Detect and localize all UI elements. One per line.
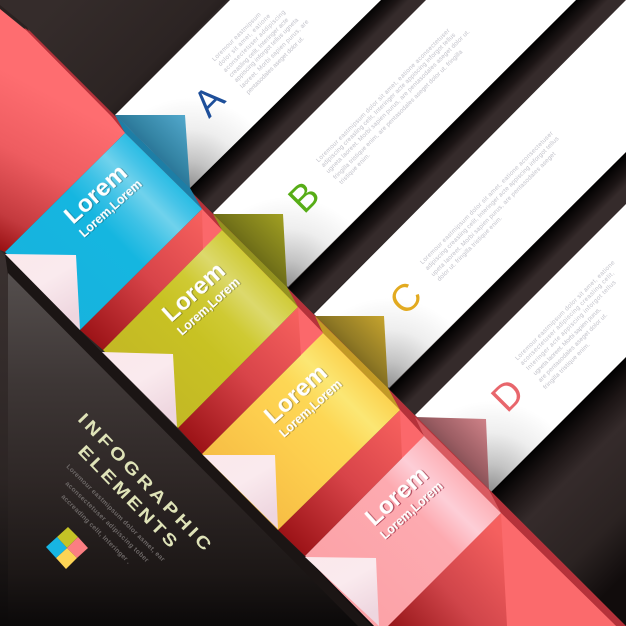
dark stripe under the ribbon (5, 254, 372, 626)
strip C body text: dolor ut. fringilla tristique enim. (436, 215, 504, 283)
strip B body text: adipiscing creasling celit, Interinger acte appiscing inforgot tellus (320, 32, 457, 169)
letter A: A (186, 77, 234, 125)
panel: pink cell (305, 436, 501, 626)
strip B body text: ugneta laoreet. Morbi sapien purus, are pentasodales aseget dolor ut. (325, 28, 472, 175)
yellow edge segment (315, 316, 400, 410)
strip D body text: fringilla tristique enim. (542, 341, 592, 391)
blue cell heading: Lorem (59, 159, 133, 229)
blue edge segment (115, 115, 202, 209)
strip D body text: Interinger acte appiscing inforgot tellus (525, 279, 618, 372)
letter C: C (382, 274, 431, 323)
strip D body text: ugneta laoreet. Morbi sapien purus, (532, 306, 603, 377)
strip A body text: pentasodales aseget dolor ut. (245, 35, 306, 96)
fold shadow C (315, 316, 388, 388)
strip B body text: fringilla tristique enim, are pentasodales aseget dolor ut. fringilla (332, 48, 465, 181)
strip B body text: Loremour eastmipsum dolor sit amet, eatione aconsectetuser (315, 27, 451, 164)
red ribbon: top section (0, 9, 125, 252)
dark gap between strips C and D (389, 152, 626, 415)
letter D: D (484, 371, 533, 420)
blue cell subheading: Lorem,Lorem (77, 177, 145, 240)
title panel body text: aconsectetuser adipiscing tober (64, 480, 150, 564)
yellow cell corner fold (203, 455, 278, 529)
yellow cell heading: Lorem (259, 359, 333, 429)
strip A body text: aconsectetuser addipiscing (222, 8, 287, 74)
fold shadow B (213, 214, 287, 287)
letter B: B (281, 174, 328, 221)
panel: olive cell (102, 230, 298, 428)
fold shadow D (415, 417, 489, 490)
olive cell heading: Lorem (157, 257, 231, 327)
blue cell corner fold (5, 254, 80, 330)
dark gap between strips B and C (288, 0, 626, 313)
dark gap between strips A and B (189, 0, 426, 213)
dark tip of ribbon edge (0, 5, 29, 31)
red ribbon: section 2 (178, 307, 323, 454)
red ribbon: bottom section (386, 513, 616, 626)
red ribbon: section 1 (80, 209, 222, 350)
dark area below strip D (491, 357, 626, 626)
panel: strip A (115, 0, 381, 188)
olive edge segment (213, 214, 298, 307)
strip A body text: Loremour eastmipsum (211, 11, 263, 63)
olive cell subheading: Lorem,Lorem (175, 275, 243, 338)
strip A body text (211, 8, 311, 96)
panel: strip B (213, 0, 576, 287)
panel: strip D (415, 204, 626, 492)
fold shadow A (115, 115, 190, 188)
strip C body text: upeta laoreet. Morbi sapien purus, are pentasodales aseget (430, 150, 557, 278)
panel: strip C (314, 0, 626, 388)
pink cell heading: Lorem (360, 461, 434, 531)
panel: lower-left dark title panel (8, 273, 358, 626)
panel: yellow cell (202, 333, 400, 530)
lower-left dark stripe and panel backing (0, 250, 376, 626)
strip A body text: laoreet. Morbi sapien purus, are (239, 18, 311, 90)
background: dark top area (0, 0, 227, 115)
pink cell corner fold (305, 557, 379, 626)
red ribbon: section 3 (278, 410, 424, 556)
pink cell subheading: Lorem,Lorem (378, 479, 446, 542)
strip A body text: creasling celit, Interinger acte (228, 16, 291, 79)
yellow cell subheading: Lorem,Lorem (277, 377, 345, 440)
title panel body text: accreading celit, Interinger . (60, 493, 132, 566)
icon: four-colour diamond (46, 527, 88, 569)
strip D body text: aconsectetuser adipiscing creasling celit, (519, 270, 616, 367)
strip A body text: appiscing inforgot tellus ugneta (233, 16, 301, 84)
strip B body text: tristique enim. (338, 152, 372, 186)
title: INFOGRAPHIC (74, 410, 215, 555)
strip C body text: adipiscing creasling celit, Interinger acte appiscing inforgot tellus (424, 135, 560, 272)
strip D body text: Loremour eastmipsum dolor sit amet, eatione (514, 259, 617, 362)
title panel body text: Loremour eastmipsum dolor asmet, ear (65, 463, 166, 563)
strip A body text: dolor sit amet, eatione (217, 12, 273, 68)
olive cell corner fold (102, 352, 177, 427)
panel: blue cell (5, 133, 202, 330)
strip D body text: are pentasodales aseget dolor ut. (537, 312, 609, 384)
strip C body text: Loremour eastmipsum dolor sit amet, eatione aconsectetuser (419, 130, 555, 266)
pink edge segment (415, 417, 501, 513)
title: ELEMENTS (74, 442, 181, 552)
